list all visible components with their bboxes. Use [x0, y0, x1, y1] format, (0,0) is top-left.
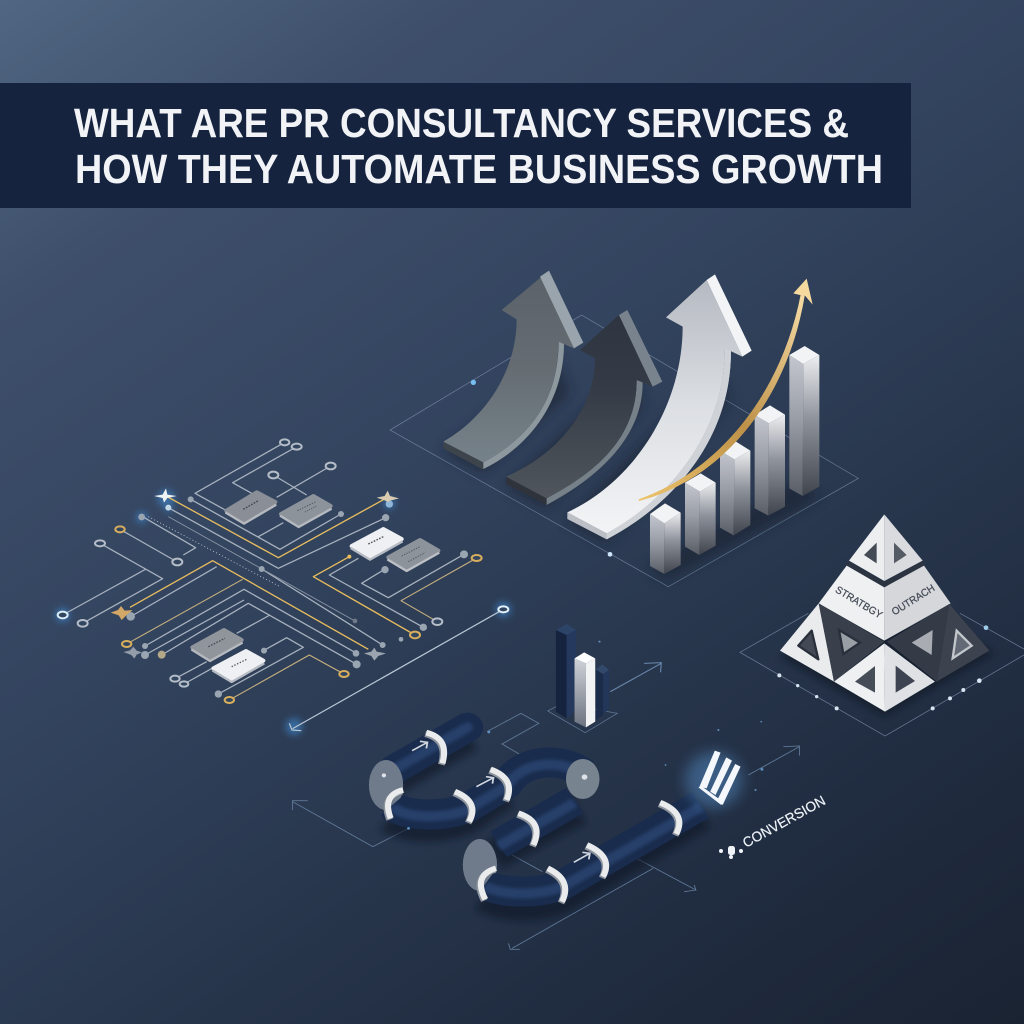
- dark bar: [556, 624, 576, 718]
- pipe section 1: [394, 727, 467, 769]
- pyramid platform: [740, 613, 1024, 736]
- pipeline shadow: [391, 737, 701, 905]
- long blue-white arrow: [289, 609, 503, 731]
- bend disc 2: [566, 759, 600, 799]
- title text: [74, 100, 883, 192]
- collar shading: [387, 734, 678, 903]
- star nodes: [111, 488, 399, 661]
- card 6: [212, 651, 264, 682]
- arrow 3: white: [567, 274, 752, 539]
- pipe collars: [388, 733, 679, 902]
- pyramid middle tier with labels: [819, 566, 951, 641]
- conversion pipeline: [292, 641, 799, 949]
- dimension lines and arrows: [292, 713, 799, 949]
- platform dots: [777, 625, 988, 710]
- gold ring nodes: [115, 526, 482, 703]
- conversion icon: [719, 846, 743, 859]
- pyramid lower tier: [780, 603, 989, 712]
- growth platform outline: [390, 315, 858, 587]
- label: strategy: STRATBGY: [833, 585, 884, 621]
- small endpoint dots: [126, 496, 468, 698]
- bar 2: [685, 473, 716, 555]
- pipe section 2: [392, 762, 583, 816]
- gray connector lines: [63, 442, 464, 694]
- pipe section 3: [498, 801, 575, 846]
- glowing target stripes: [698, 751, 741, 805]
- card 2: [280, 496, 332, 527]
- mini platform: [548, 703, 617, 733]
- bar 3: [720, 441, 750, 535]
- thin gold lines: [127, 558, 477, 700]
- mini arrow: [610, 663, 661, 692]
- card 3: [351, 529, 403, 560]
- conversion label: [719, 792, 828, 859]
- bend disc 1: [369, 760, 403, 810]
- ring nodes: [58, 439, 508, 687]
- title text: HOW THEY AUTOMATE BUSINESS GROWTH: [75, 146, 883, 192]
- bend disc 3: [463, 839, 497, 891]
- gold circuit lines: [130, 496, 415, 649]
- disc highlights: [382, 773, 587, 780]
- pipe arrows: [412, 741, 590, 862]
- cast shadows: [443, 360, 820, 580]
- particles: [407, 641, 763, 830]
- arrow 1: gray: [443, 271, 583, 469]
- pyramid top tier: [849, 514, 923, 581]
- label: outreach: OUTRACH: [890, 583, 937, 618]
- circuit diagram: automation network: [55, 439, 511, 735]
- title banner: [0, 83, 911, 208]
- card 1: [225, 492, 276, 524]
- target glow: [685, 752, 742, 808]
- arrow 2: charcoal: [506, 310, 662, 505]
- dim thin lines: [148, 517, 355, 621]
- pyramid shadow: [780, 627, 993, 717]
- card 5: [191, 630, 243, 661]
- bar 4: [755, 405, 785, 516]
- title text: WHAT ARE PR CONSULTANCY SERVICES &: [74, 100, 849, 146]
- bar 1: [650, 503, 681, 574]
- gold trend arrow: [638, 279, 813, 501]
- network cards: [191, 492, 439, 682]
- conversion text: CONVERSION: [740, 792, 828, 851]
- short dark bar: [596, 664, 609, 720]
- pipe section 4: [485, 805, 701, 893]
- card 4: [387, 540, 439, 571]
- node glows: [55, 490, 511, 735]
- small bar chart and arrow: [548, 624, 661, 733]
- strategy pyramid: [740, 514, 1024, 736]
- dark band: [847, 563, 924, 585]
- white bar: [575, 652, 595, 727]
- growth arrows and bar chart: [443, 271, 820, 580]
- bar 5: [789, 346, 819, 496]
- bars: [650, 346, 819, 574]
